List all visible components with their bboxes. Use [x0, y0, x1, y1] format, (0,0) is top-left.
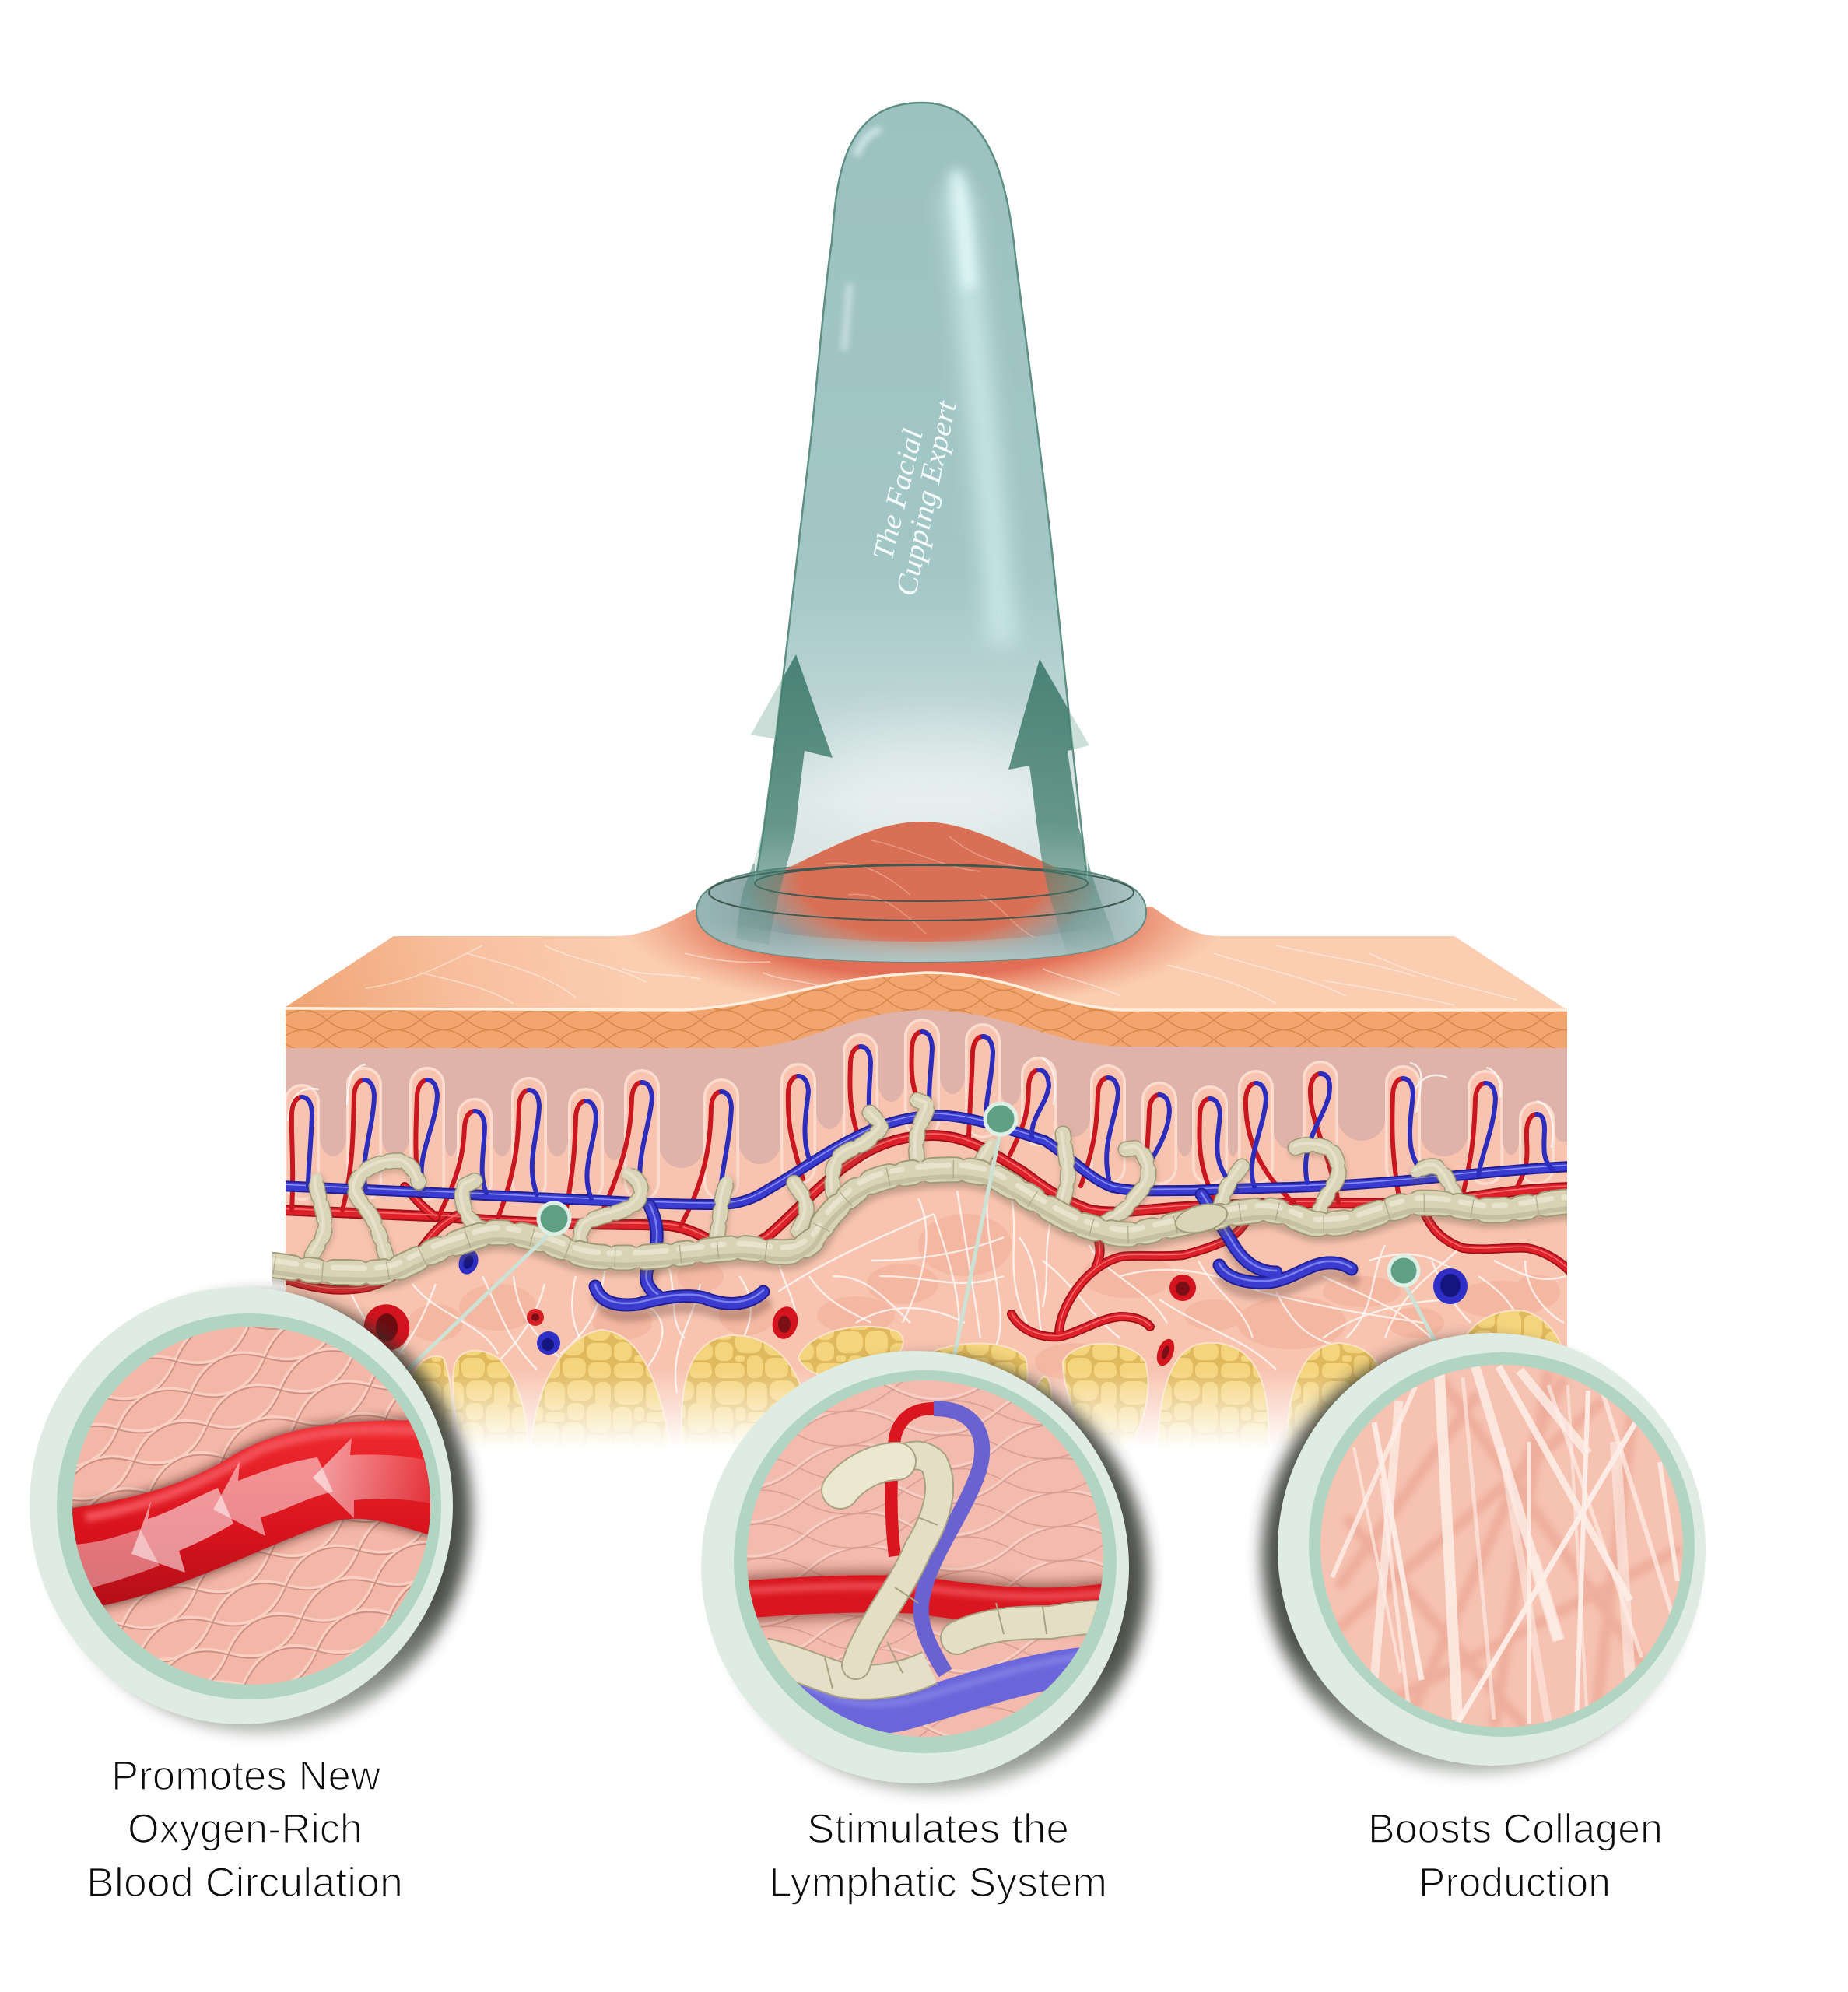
capillary loops: arterial side [292, 1032, 1537, 1226]
facial cup [696, 103, 1146, 962]
caption: collagen: Boosts Collagen [1368, 1806, 1663, 1852]
skin cross-section block [273, 907, 1572, 1455]
red arteries [280, 1134, 1572, 1337]
rim outlines [709, 864, 1134, 921]
magnifier: collagen [1262, 1333, 1706, 1773]
dermis background [286, 1004, 1567, 1455]
callout pin: lymphatic [985, 1103, 1016, 1135]
caption: blood circulation [86, 1753, 403, 1906]
magnified collagen fibres [1315, 1362, 1688, 1735]
callout pointer lines [406, 1130, 1436, 1371]
cup logo text [867, 397, 963, 599]
cup highlights [837, 124, 1026, 815]
outer ring [30, 1287, 453, 1724]
callout pin: blood vessel [538, 1203, 570, 1234]
shadow [48, 1295, 472, 1732]
caption: lymphatic: Stimulates the [807, 1806, 1069, 1852]
dermal papillae [302, 1036, 1537, 1183]
suction arrow right [1008, 659, 1117, 956]
inner ring [57, 1313, 441, 1699]
caption: blood circulation: Promotes New [111, 1753, 381, 1799]
capillary loops: venous side [302, 1032, 1552, 1205]
cup rim [696, 862, 1146, 962]
skin top surface [286, 907, 1567, 1010]
magnified lymph vessels [739, 1373, 1113, 1746]
caption: lymphatic [769, 1806, 1107, 1906]
caption: blood circulation: Blood Circulation [86, 1860, 403, 1906]
inner ring [734, 1370, 1117, 1753]
cup logo text: Cupping Expert [890, 397, 963, 599]
caption: lymphatic: Lymphatic System [769, 1860, 1107, 1906]
raised skin dome [747, 822, 1097, 962]
fat lobes [409, 1310, 1567, 1447]
shadow [1262, 1340, 1690, 1773]
cup body [755, 103, 1088, 903]
lymphatic vessels [273, 1099, 1572, 1280]
caption: collagen: Production [1418, 1860, 1611, 1906]
blue veins [280, 1113, 1572, 1316]
cup logo text: The Facial [867, 426, 930, 563]
connective tissue fibres [288, 1058, 1566, 1393]
vessel cross-sections [356, 1247, 1468, 1368]
outer ring [701, 1351, 1129, 1783]
callout pin: collagen [1389, 1256, 1418, 1285]
epidermis layer [286, 973, 1567, 1048]
caption: blood circulation: Oxygen-Rich [128, 1806, 363, 1852]
magnified blood vessel [72, 1327, 430, 1685]
caption: collagen [1368, 1806, 1663, 1906]
magnifier: lymphatic system [701, 1351, 1148, 1791]
shadow [720, 1359, 1148, 1791]
inner ring [1309, 1352, 1695, 1737]
flow arrows [70, 1438, 444, 1591]
magnifier: blood circulation [30, 1287, 472, 1732]
outer ring [1278, 1333, 1706, 1766]
suction arrow left [736, 654, 833, 945]
rim lower edge [696, 912, 1146, 962]
